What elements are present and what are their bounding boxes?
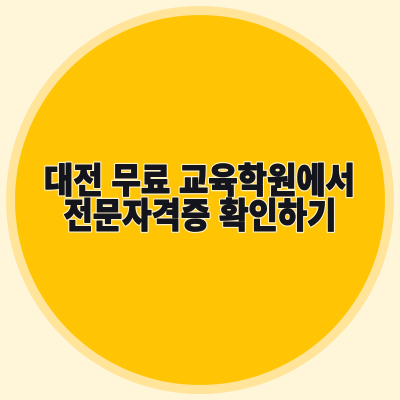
title <box>44 162 355 236</box>
title: 대전 무료 교육학원에서 <box>44 162 355 201</box>
title: 전문자격증 확인하기 <box>64 197 336 236</box>
title: 대전 무료 교육학원에서 <box>44 162 355 201</box>
title: 전문자격증 확인하기 <box>64 197 336 236</box>
